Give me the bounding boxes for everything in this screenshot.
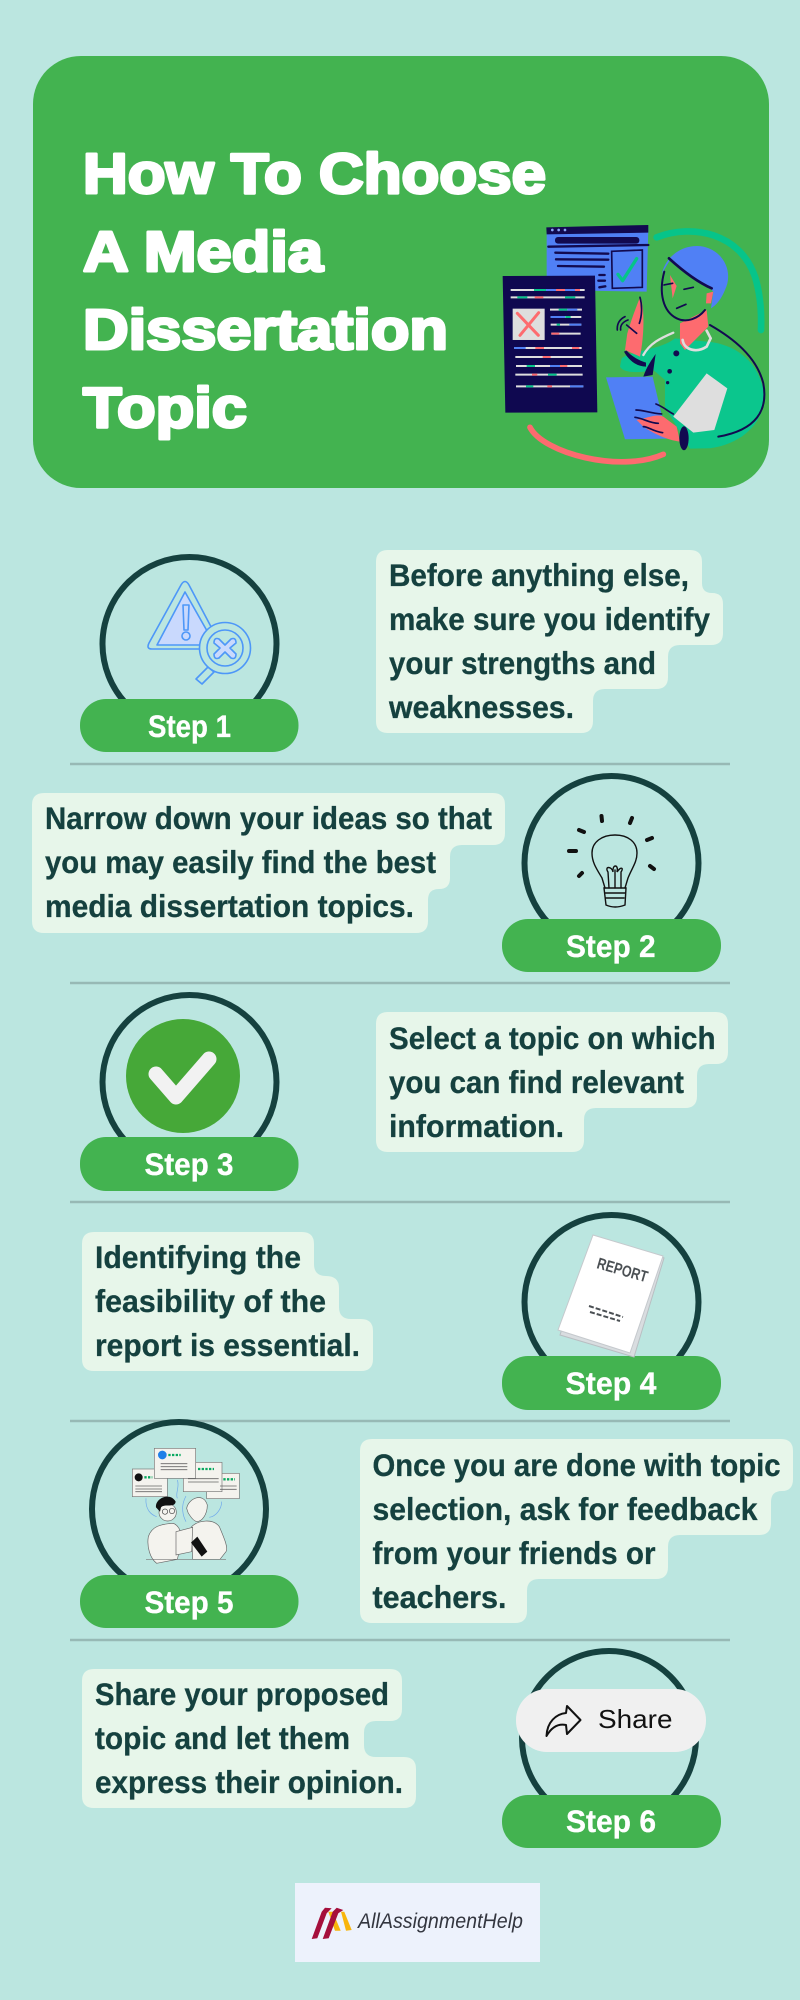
- illustration: woman with documents: [503, 225, 764, 462]
- step 1 text: [376, 550, 723, 733]
- step 1: [80, 550, 723, 752]
- step 1 text: Before anything else,: [389, 557, 689, 593]
- logo mark: [312, 1908, 352, 1939]
- step 5 text: teachers.: [372, 1579, 506, 1615]
- step 5 pill: Step 5: [144, 1584, 234, 1620]
- share button: Share: [598, 1704, 672, 1734]
- step 1 text: make sure you identify: [389, 601, 710, 637]
- icon: report document: [558, 1235, 664, 1357]
- step 2 text: Narrow down your ideas so that: [45, 800, 492, 836]
- step 5 circle: [92, 1422, 266, 1596]
- step 6 text: [82, 1669, 416, 1808]
- step 2 text: media dissertation topics.: [45, 888, 414, 924]
- title: [83, 142, 546, 440]
- step 1 circle: [102, 557, 276, 731]
- step 5 text: from your friends or: [372, 1535, 656, 1571]
- step 3: [80, 995, 728, 1191]
- step 6 text: Share your proposed: [95, 1676, 389, 1712]
- share button: [516, 1689, 706, 1752]
- icon: warning and magnifier: [148, 582, 250, 684]
- step 3 circle: [102, 995, 276, 1169]
- step 6 circle: [522, 1651, 696, 1825]
- step 5 text: Once you are done with topic: [372, 1447, 780, 1483]
- step 1 pill: [80, 699, 298, 752]
- step 4: [82, 1215, 721, 1410]
- step 4 text: feasibility of the: [95, 1283, 326, 1319]
- step 3 pill: Step 3: [144, 1146, 234, 1182]
- step 5: [80, 1422, 793, 1628]
- title: Dissertation: [83, 298, 448, 362]
- step 4 pill: Step 4: [566, 1365, 657, 1401]
- step 4 circle: [524, 1215, 698, 1389]
- logo: [295, 1883, 540, 1962]
- step 3 text: you can find relevant: [389, 1064, 684, 1100]
- header panel: [33, 56, 769, 488]
- step 6 text: express their opinion.: [95, 1764, 403, 1800]
- icon: report document: REPORT: [595, 1256, 650, 1286]
- step 6: [82, 1651, 721, 1848]
- step 2 pill: Step 2: [566, 928, 656, 964]
- step 1 text: your strengths and: [389, 645, 656, 681]
- step 2 text: you may easily find the best: [45, 844, 436, 880]
- step 5 pill: [80, 1575, 298, 1628]
- step 3 text: Select a topic on which: [389, 1020, 716, 1056]
- step 1 pill: Step 1: [148, 708, 231, 744]
- icon: share arrow: [546, 1706, 580, 1736]
- step 2: [32, 776, 721, 972]
- step 2 circle: [524, 776, 698, 950]
- step 6 text: topic and let them: [95, 1720, 350, 1756]
- step 6 pill: Step 6: [566, 1803, 656, 1839]
- step 4 text: report is essential.: [95, 1327, 360, 1363]
- logo wordmark: AllAssignmentHelp: [356, 1910, 523, 1933]
- icon: check mark disc: [126, 1019, 240, 1133]
- step 4 text: [82, 1232, 373, 1371]
- step 5 text: [360, 1439, 793, 1623]
- step 2 pill: [502, 919, 721, 972]
- step 4 text: Identifying the: [95, 1239, 301, 1275]
- step 4 pill: [502, 1356, 721, 1410]
- step 3 pill: [80, 1137, 298, 1191]
- illustration: two people reviewing feedback cards: [132, 1448, 239, 1563]
- step 1 text: weaknesses.: [388, 689, 574, 725]
- step 3 text: [376, 1012, 728, 1152]
- title: A Media: [83, 220, 324, 284]
- title: How To Choose: [83, 142, 546, 206]
- icon: light bulb: [569, 816, 654, 907]
- step 3 text: information.: [389, 1108, 564, 1144]
- title: Topic: [83, 376, 247, 440]
- step 2 text: [32, 793, 505, 933]
- step 5 text: selection, ask for feedback: [372, 1491, 758, 1527]
- step 6 pill: [502, 1795, 721, 1848]
